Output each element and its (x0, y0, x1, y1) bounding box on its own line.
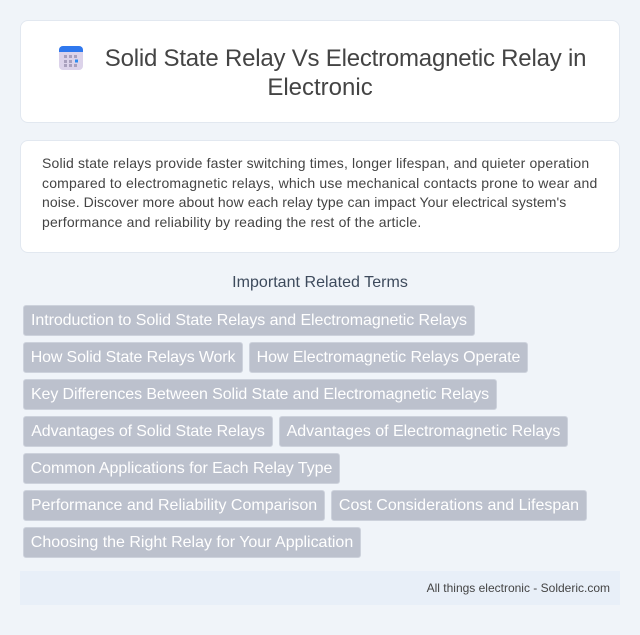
tag (23, 342, 243, 373)
description text (42, 155, 597, 230)
tag (331, 490, 587, 521)
tag: Performance and Reliability Comparison (31, 497, 317, 514)
header card (20, 20, 620, 123)
description text: compared to electromagnetic relays, which use mechanical contacts prone to wear and (42, 174, 597, 190)
section heading: Important Related Terms (232, 274, 408, 291)
tag (23, 527, 361, 558)
tag: Choosing the Right Relay for Your Application (31, 534, 353, 551)
tag: Advantages of Solid State Relays (31, 423, 265, 440)
tag: Common Applications for Each Relay Type (31, 460, 332, 477)
tag (23, 490, 325, 521)
tag (23, 305, 475, 336)
tag: How Electromagnetic Relays Operate (257, 349, 520, 366)
title: Electronic (267, 74, 373, 100)
title (105, 44, 586, 100)
tag: Advantages of Electromagnetic Relays (287, 423, 560, 440)
title: Solid State Relay Vs Electromagnetic Relay in (105, 44, 586, 72)
description text: Solid state relays provide faster switching times, longer lifespan, and quieter operation (42, 155, 589, 171)
description text: noise. Discover more about how each relay type can impact Your electrical system's (42, 194, 566, 210)
description card (20, 140, 620, 253)
tag: Key Differences Between Solid State and Electromagnetic Relays (31, 386, 489, 403)
tag: Introduction to Solid State Relays and Electromagnetic Relays (31, 312, 467, 329)
tag (279, 416, 568, 447)
tag (249, 342, 528, 373)
tag (23, 379, 497, 410)
icon: calendar (59, 46, 83, 70)
footer text: All things electronic - Solderic.com (427, 581, 610, 595)
tag (23, 453, 340, 484)
footer (20, 571, 620, 605)
description text: performance and reliability by reading the rest of the article. (42, 214, 421, 230)
tag: Cost Considerations and Lifespan (339, 497, 579, 514)
tag: How Solid State Relays Work (31, 349, 235, 366)
tag (23, 416, 273, 447)
